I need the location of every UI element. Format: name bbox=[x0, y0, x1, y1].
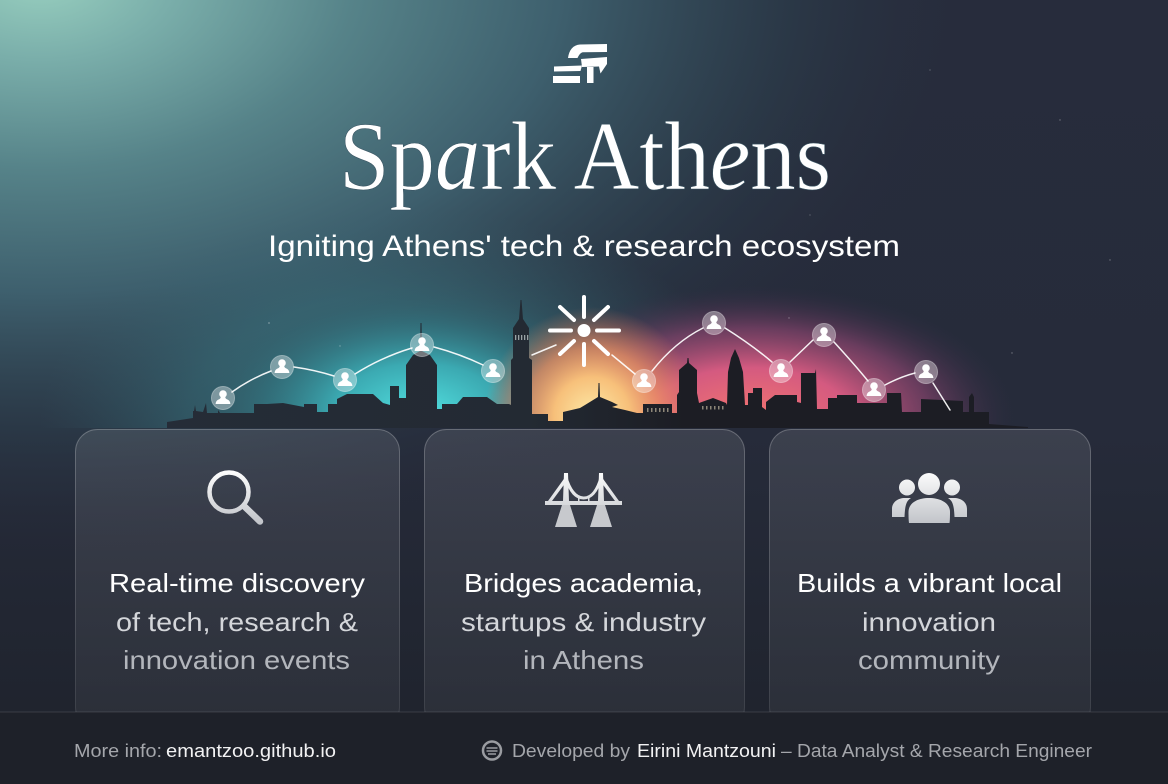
footer: more info bbox=[74, 741, 336, 761]
subtitle: Igniting Athens' tech & research ecosystem bbox=[268, 230, 900, 263]
panel: bridges: in Athens bbox=[523, 645, 644, 675]
background gradient bbox=[0, 0, 1111, 478]
panel: bridges bbox=[424, 430, 744, 730]
skyline silhouette bbox=[167, 300, 1028, 428]
panel: community bbox=[770, 430, 1090, 730]
footer: more info: More info: bbox=[74, 741, 162, 761]
panel: community: innovation bbox=[862, 607, 996, 637]
footer: more info: emantzoo.github.io bbox=[166, 741, 336, 761]
panel: community: Builds a vibrant local bbox=[797, 568, 1062, 598]
network lines bbox=[232, 328, 950, 410]
panel: discovery: Real-time discovery bbox=[109, 568, 365, 598]
panel: community: community bbox=[858, 645, 1000, 675]
footer bbox=[0, 712, 1168, 784]
panel: discovery bbox=[76, 430, 400, 730]
footer: credit: – Data Analyst & Research Engineer bbox=[781, 741, 1092, 761]
title: Spark Athens bbox=[339, 103, 831, 210]
panel: bridges: Bridges academia, bbox=[464, 568, 703, 598]
footer: credit: Eirini Mantzouni bbox=[637, 741, 776, 761]
footer: credit bbox=[512, 741, 1092, 761]
footer: credit: Developed by bbox=[512, 741, 630, 761]
icon: footer badge bbox=[483, 742, 501, 760]
panel: bridges: startups & industry bbox=[461, 607, 706, 637]
icon: logo bbox=[553, 44, 607, 83]
icon: spark bbox=[550, 297, 619, 365]
icon: bridge bbox=[545, 473, 622, 527]
panel: discovery: innovation events bbox=[123, 645, 350, 675]
icon: magnifier bbox=[210, 472, 260, 522]
panel: discovery: of tech, research & bbox=[116, 607, 358, 637]
icon: people bbox=[892, 473, 967, 523]
network nodes bbox=[211, 311, 938, 410]
